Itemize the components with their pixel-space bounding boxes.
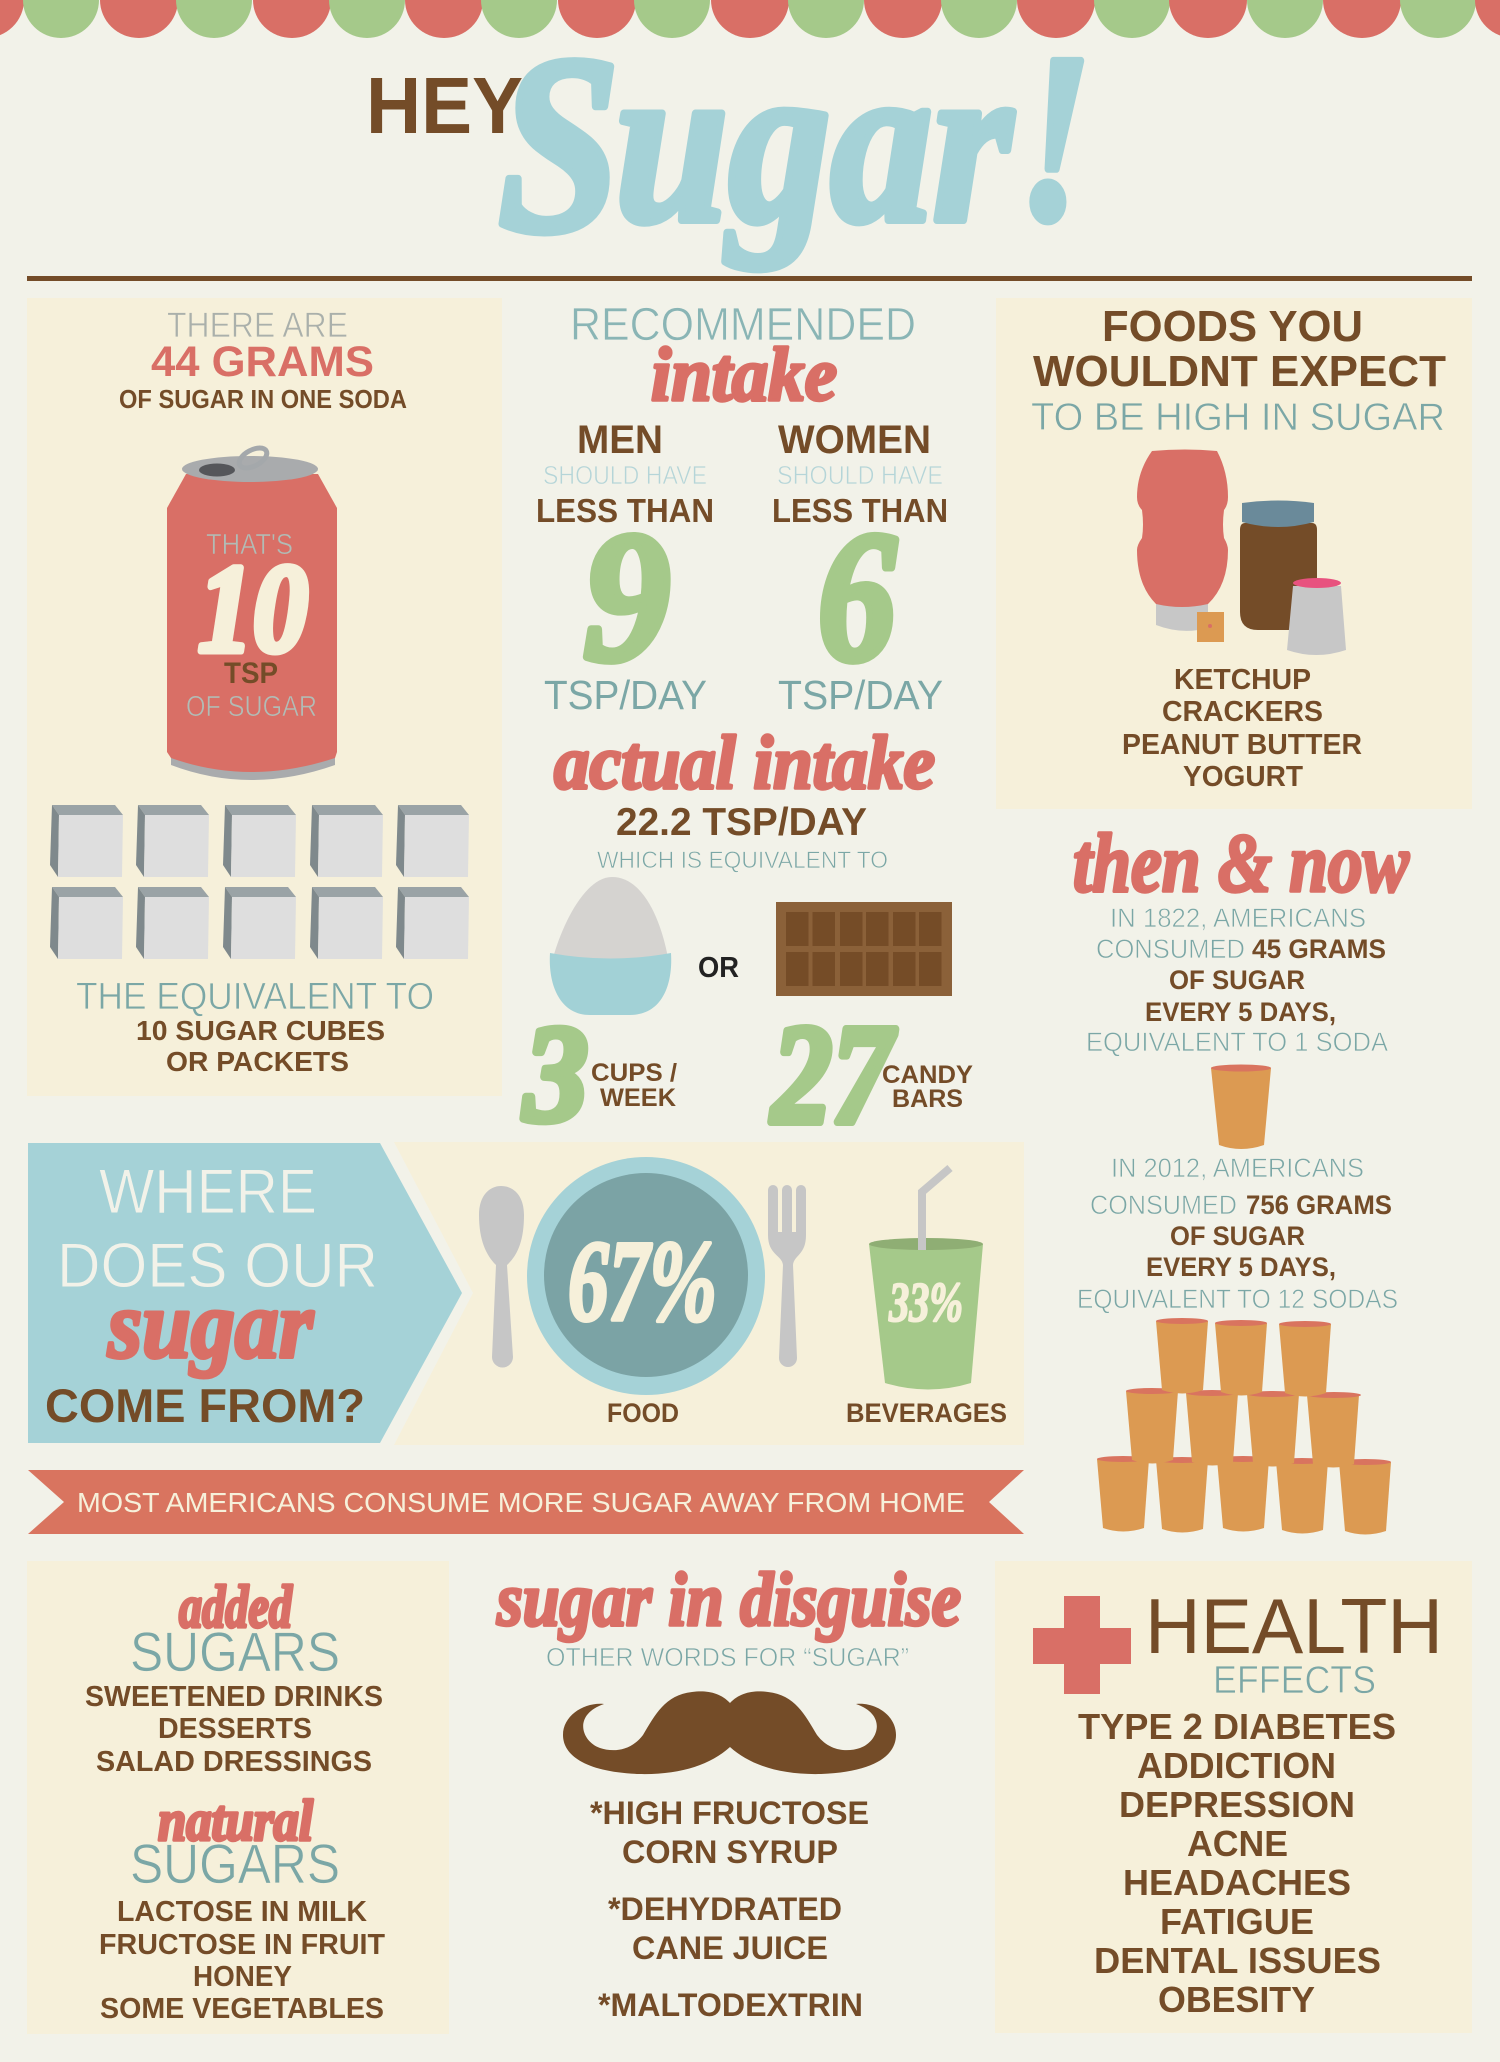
- then and now heading: then & now: [1073, 817, 1410, 910]
- panel: health effects: [995, 1561, 1472, 2033]
- 1822 text: 45 GRAMS: [1252, 934, 1386, 964]
- icon: soda can: [167, 444, 337, 780]
- icon: moustache: [563, 1691, 896, 1774]
- foods heading: FOODS YOU: [1102, 302, 1363, 351]
- 1822 text: OF SUGAR: [1169, 965, 1305, 995]
- icon: soda can: TSP: [224, 657, 278, 690]
- panel: soda: [27, 298, 502, 1096]
- actual intake: 22.2 TSP/DAY: [616, 801, 867, 844]
- food label: FOOD: [607, 1398, 679, 1428]
- panel: then and now: [1073, 817, 1410, 1534]
- icon: spoon: [479, 1186, 524, 1368]
- icon: soda can: OF SUGAR: [186, 691, 317, 723]
- natural sugars: [99, 1788, 385, 2025]
- 2012 text: EQUIVALENT TO 12 SODAS: [1077, 1284, 1398, 1314]
- panel: where does our sugar come from: [28, 1142, 1024, 1445]
- soda heading: 44 GRAMS: [151, 338, 374, 386]
- 1822 text: EQUIVALENT TO 1 SODA: [1086, 1027, 1388, 1057]
- foods list: PEANUT BUTTER: [1122, 729, 1362, 761]
- health list: DENTAL ISSUES: [1094, 1940, 1381, 1981]
- icon: peanut butter jar: [1240, 500, 1317, 630]
- 2012 text: 756 GRAMS: [1246, 1190, 1392, 1220]
- 2012 text: IN 2012, AMERICANS: [1111, 1153, 1364, 1183]
- icon: ketchup bottle: [1137, 450, 1228, 631]
- blue arrow heading: [28, 1143, 462, 1443]
- actual intake: actual intake: [554, 721, 935, 805]
- chart: plate 67 percent food: [527, 1157, 765, 1395]
- chart: drink 33 percent beverages: [869, 1168, 983, 1390]
- natural sugars: HONEY: [193, 1961, 292, 1993]
- icon: single cup: [1211, 1064, 1271, 1149]
- 2012 text: [1077, 1153, 1398, 1314]
- blue arrow heading: WHERE: [99, 1157, 317, 1227]
- scalloped top border: [0, 0, 1500, 38]
- health list: HEADACHES: [1123, 1862, 1351, 1903]
- 1822 text: CONSUMED: [1096, 934, 1245, 964]
- natural sugars: LACTOSE IN MILK: [117, 1896, 367, 1928]
- or label: OR: [698, 952, 739, 984]
- icon: medical cross: [1033, 1596, 1131, 1694]
- title: HEY: [366, 61, 523, 150]
- 2012 text: OF SUGAR: [1170, 1221, 1305, 1251]
- health heading: HEALTH: [1145, 1582, 1443, 1670]
- icon: ten sugar cubes: [50, 805, 469, 959]
- ribbon banner: MOST AMERICANS CONSUME MORE SUGAR AWAY FROM HOME: [77, 1487, 965, 1518]
- men column: TSP/DAY: [544, 672, 707, 718]
- disguise list: CORN SYRUP: [622, 1834, 838, 1870]
- 2012 text: EVERY 5 DAYS,: [1146, 1252, 1336, 1282]
- icon: pyramid of twelve cups: [1097, 1318, 1391, 1534]
- soda heading: OF SUGAR IN ONE SODA: [119, 384, 407, 414]
- stat: 27 candy bars: [770, 995, 973, 1153]
- panel: added and natural sugars: [27, 1561, 449, 2034]
- women column: 6: [818, 494, 896, 700]
- title: ugar: [615, 14, 1014, 271]
- beverages label: BEVERAGES: [846, 1398, 1007, 1428]
- ribbon banner: [28, 1470, 1024, 1534]
- women column: TSP/DAY: [778, 672, 943, 718]
- foods heading: [1031, 302, 1446, 439]
- health list: ADDICTION: [1137, 1745, 1336, 1786]
- added sugars: DESSERTS: [158, 1713, 312, 1745]
- recommended heading: intake: [651, 333, 837, 417]
- disguise heading: OTHER WORDS FOR “SUGAR”: [546, 1642, 909, 1672]
- chart: drink 33 percent beverages: 33%: [888, 1272, 963, 1334]
- blue arrow heading: COME FROM?: [45, 1379, 365, 1432]
- men column: LESS THAN: [536, 492, 714, 529]
- disguise list: [590, 1795, 869, 2023]
- panel: recommended intake: [522, 298, 973, 1153]
- 1822 text: EVERY 5 DAYS,: [1145, 997, 1336, 1027]
- 1822 text: IN 1822, AMERICANS: [1110, 903, 1366, 933]
- icon: yogurt cup: [1287, 578, 1346, 655]
- women column: LESS THAN: [772, 492, 948, 529]
- blue arrow heading: DOES OUR: [57, 1231, 378, 1301]
- title: [366, 4, 1092, 286]
- soda heading: THERE ARE: [167, 306, 348, 345]
- recommended heading: RECOMMENDED: [570, 298, 916, 350]
- title: !: [1018, 4, 1092, 270]
- panel: sugar in disguise: [496, 1558, 961, 2023]
- foods heading: WOULDNT EXPECT: [1033, 347, 1446, 396]
- health list: DEPRESSION: [1119, 1784, 1355, 1825]
- stat: 3 cups per week: CUPS /: [591, 1059, 677, 1087]
- foods list: KETCHUP: [1174, 664, 1311, 696]
- recommended heading: [570, 298, 916, 417]
- stat: 3 cups per week: [522, 997, 677, 1150]
- men column: MEN: [577, 418, 663, 462]
- blue arrow heading: sugar: [107, 1271, 315, 1378]
- stat: 3 cups per week: WEEK: [600, 1084, 676, 1112]
- health list: OBESITY: [1158, 1979, 1315, 2020]
- stat: 3 cups per week: 3: [522, 997, 588, 1150]
- health list: [1078, 1706, 1396, 2020]
- soda heading: [119, 306, 407, 414]
- health list: TYPE 2 DIABETES: [1078, 1706, 1396, 1747]
- added sugars: SWEETENED DRINKS: [85, 1681, 383, 1713]
- natural sugars: SUGARS: [130, 1832, 340, 1895]
- chart: plate 67 percent food: 67%: [568, 1218, 717, 1346]
- actual intake: WHICH IS EQUIVALENT TO: [597, 847, 888, 874]
- icon: fork: [768, 1185, 806, 1367]
- disguise heading: [496, 1558, 961, 1672]
- men column: [536, 418, 714, 718]
- women column: [772, 418, 948, 718]
- cubes caption: THE EQUIVALENT TO: [76, 976, 434, 1018]
- natural sugars: SOME VEGETABLES: [100, 1993, 384, 2025]
- disguise list: *MALTODEXTRIN: [598, 1987, 863, 2023]
- 2012 text: CONSUMED: [1090, 1190, 1237, 1220]
- disguise heading: sugar in disguise: [496, 1558, 961, 1642]
- foods list: YOGURT: [1183, 761, 1303, 793]
- natural sugars: FRUCTOSE IN FRUIT: [99, 1929, 385, 1961]
- health list: FATIGUE: [1160, 1901, 1314, 1942]
- health list: ACNE: [1187, 1823, 1288, 1864]
- added sugars: SUGARS: [130, 1620, 340, 1683]
- disguise list: *DEHYDRATED: [608, 1891, 842, 1927]
- foods heading: TO BE HIGH IN SUGAR: [1031, 396, 1445, 439]
- foods list: [1122, 664, 1362, 793]
- panel: foods you wouldn't expect: [996, 298, 1472, 809]
- women column: SHOULD HAVE: [777, 460, 943, 490]
- stat: 27 candy bars: BARS: [892, 1085, 963, 1113]
- health heading: EFFECTS: [1213, 1659, 1376, 1702]
- actual intake: [554, 721, 935, 874]
- women column: WOMEN: [778, 418, 931, 462]
- stat: 27 candy bars: 27: [770, 995, 896, 1153]
- title: S: [498, 4, 620, 286]
- icon: soda can: THAT'S: [206, 529, 293, 561]
- cubes caption: OR PACKETS: [166, 1046, 349, 1077]
- foods list: CRACKERS: [1162, 696, 1323, 728]
- added sugars: added: [179, 1574, 293, 1640]
- stat: 27 candy bars: CANDY: [882, 1061, 973, 1089]
- cubes caption: [76, 976, 434, 1077]
- added sugars: SALAD DRESSINGS: [96, 1746, 372, 1778]
- men column: 9: [584, 494, 670, 700]
- icon: soda can: 10: [198, 540, 308, 679]
- disguise list: *HIGH FRUCTOSE: [590, 1795, 869, 1831]
- disguise list: CANE JUICE: [632, 1930, 828, 1966]
- added sugars: [85, 1574, 383, 1778]
- cubes caption: 10 SUGAR CUBES: [136, 1015, 385, 1046]
- icon: bowl of sugar: [550, 877, 671, 1015]
- icon: cracker: [1197, 612, 1224, 642]
- icon: chocolate bar: [776, 902, 952, 996]
- natural sugars: natural: [158, 1788, 314, 1853]
- men column: SHOULD HAVE: [543, 460, 707, 490]
- 1822 text: [1086, 903, 1388, 1057]
